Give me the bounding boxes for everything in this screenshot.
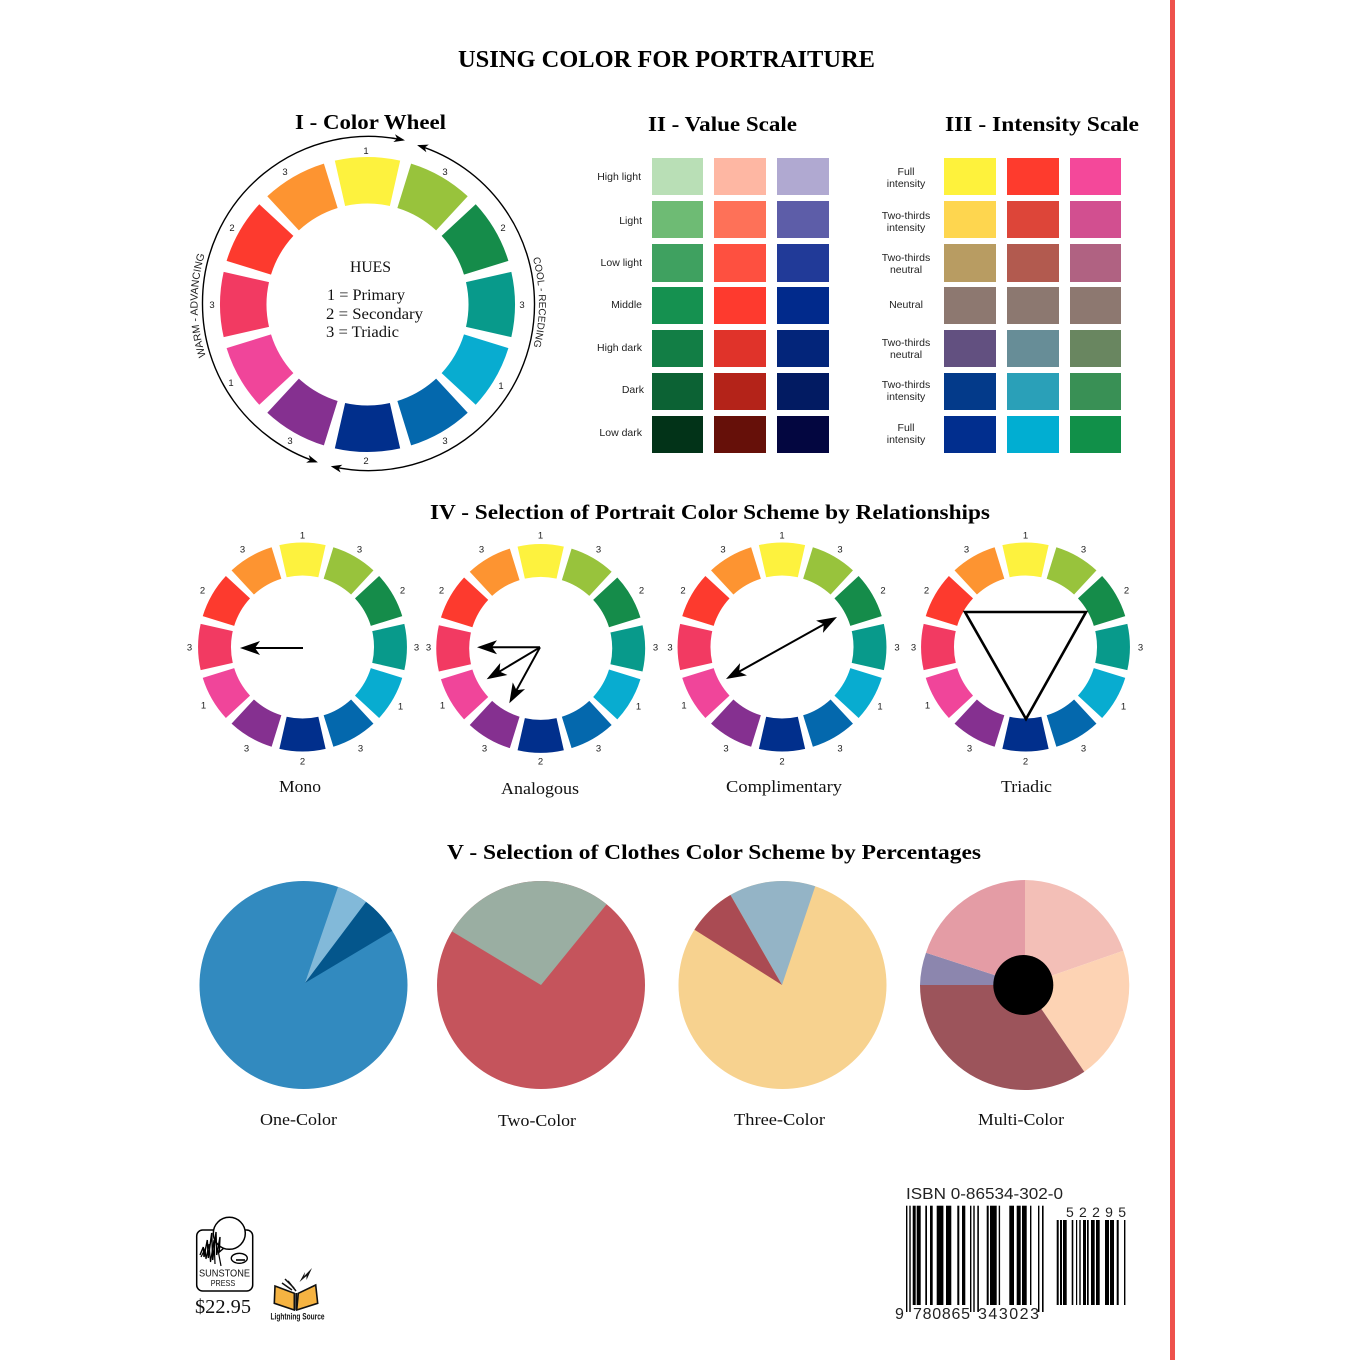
value row labels: Middle bbox=[611, 299, 642, 311]
intensity row labels: intensity bbox=[887, 391, 926, 403]
panel: IV portrait color schemes bbox=[187, 500, 1143, 798]
pie: three-color bbox=[678, 860, 886, 1129]
caption: analogous: Analogous bbox=[501, 779, 579, 798]
hue number labels: 3 bbox=[287, 436, 293, 447]
wheel: complimentary: 2 bbox=[680, 586, 686, 596]
wheel: mono: 3 bbox=[244, 744, 249, 754]
wheel: triadic: 3 bbox=[1081, 744, 1086, 754]
wheel: triadic: 2 bbox=[1124, 586, 1129, 596]
barcode digits: 343023 bbox=[978, 1306, 1039, 1323]
barcode bbox=[906, 1206, 1044, 1312]
panel: III intensity scale bbox=[882, 112, 1139, 453]
pie: two-color bbox=[435, 870, 645, 1130]
wheel: mono: 3 bbox=[187, 642, 192, 654]
barcode digits bbox=[895, 1306, 1039, 1323]
hues legend: 3 = Triadic bbox=[326, 324, 399, 341]
wheel: analogous: 3 bbox=[479, 544, 484, 556]
barcode digits: 780865 bbox=[913, 1306, 970, 1323]
wheel: mono: 3 bbox=[240, 544, 245, 556]
caption: complimentary: Complimentary bbox=[726, 777, 843, 796]
logo: sunstone press bbox=[197, 1217, 253, 1291]
logo: lightning source bbox=[270, 1268, 324, 1322]
wheel: analogous: 3 bbox=[596, 744, 601, 754]
intensity row labels: intensity bbox=[887, 434, 926, 446]
wheel: mono bbox=[187, 530, 419, 796]
hues legend: 1 = Primary bbox=[327, 287, 405, 304]
intensity row labels: Two-thirds bbox=[882, 337, 930, 349]
intensity row labels: Full bbox=[898, 166, 914, 178]
wheel: complimentary: 1 bbox=[877, 702, 883, 712]
wheel: analogous: 1 bbox=[440, 700, 445, 712]
caption: one-color: One-Color bbox=[260, 1110, 337, 1129]
wheel: mono: 2 bbox=[400, 586, 405, 596]
wheel: analogous: 2 bbox=[538, 756, 543, 768]
wheel: analogous: 2 bbox=[639, 586, 644, 596]
hue number labels: 1 bbox=[363, 146, 369, 157]
intensity row labels: Full bbox=[898, 422, 914, 434]
logo: sunstone press: PRESS bbox=[211, 1278, 235, 1288]
pie: one-color bbox=[200, 868, 409, 1129]
wheel: complimentary: 3 bbox=[723, 744, 729, 754]
wheel: triadic bbox=[911, 530, 1143, 796]
hues legend: HUES bbox=[350, 259, 391, 276]
red spine line bbox=[1170, 0, 1175, 1360]
value row labels: Dark bbox=[622, 384, 645, 396]
wheel: triadic: 1 bbox=[925, 700, 930, 712]
heading: intensity scale: III - Intensity Scale bbox=[945, 112, 1139, 136]
wheel: triadic: 2 bbox=[924, 586, 929, 596]
wheel: mono: 1 bbox=[398, 702, 403, 712]
logo: lightning source: Lightning Source bbox=[270, 1312, 324, 1322]
wheel: triadic: 2 bbox=[1023, 756, 1028, 768]
intensity row labels: Two-thirds bbox=[882, 210, 930, 222]
caption: multi-color: Multi-Color bbox=[978, 1110, 1064, 1129]
wheel: analogous: 1 bbox=[636, 702, 641, 712]
hue number labels: 2 bbox=[500, 223, 506, 234]
caption: three-color: Three-Color bbox=[734, 1110, 825, 1129]
wheel: analogous: 2 bbox=[439, 586, 444, 596]
value swatches bbox=[652, 158, 829, 453]
wheel: mono: 2 bbox=[200, 586, 205, 596]
heading: value scale: II - Value Scale bbox=[648, 112, 797, 136]
wheel: mono: 3 bbox=[357, 544, 362, 556]
wheel: complimentary: 3 bbox=[894, 642, 900, 654]
barcode digits: 9 bbox=[895, 1306, 904, 1323]
wheel: triadic: 3 bbox=[964, 544, 969, 556]
wheel: triadic: 1 bbox=[1121, 702, 1126, 712]
hue number labels: 1 bbox=[498, 381, 504, 392]
caption: two-color: Two-Color bbox=[498, 1111, 576, 1130]
value row labels bbox=[597, 171, 645, 439]
title: USING COLOR FOR PORTRAITURE bbox=[458, 47, 875, 73]
hue number labels bbox=[209, 146, 525, 467]
wheel: triadic: 1 bbox=[1023, 530, 1028, 542]
heading: percentages: V - Selection of Clothes Color Scheme by Percentages bbox=[447, 840, 981, 864]
hue number labels: 3 bbox=[282, 167, 288, 178]
intensity row labels: Two-thirds bbox=[882, 252, 930, 264]
intensity row labels bbox=[882, 166, 930, 446]
wheel: analogous: 1 bbox=[538, 530, 543, 542]
intensity row labels: Two-thirds bbox=[882, 379, 930, 391]
hues legend bbox=[326, 259, 423, 341]
wheel: analogous bbox=[426, 530, 658, 798]
warm label: WARM - ADVANCING bbox=[190, 254, 206, 358]
wheel: analogous: 3 bbox=[596, 544, 601, 556]
wheel: mono: 1 bbox=[300, 530, 305, 542]
wheel: triadic: 3 bbox=[967, 744, 972, 754]
intensity row labels: intensity bbox=[887, 222, 926, 234]
wheel: analogous: 3 bbox=[426, 642, 431, 654]
hue number labels: 3 bbox=[519, 300, 525, 311]
heading: color wheel: I - Color Wheel bbox=[295, 110, 446, 134]
intensity row labels: intensity bbox=[887, 178, 926, 190]
caption: mono: Mono bbox=[279, 777, 321, 796]
wheel: mono: 1 bbox=[201, 700, 206, 712]
wheel: complimentary: 1 bbox=[681, 700, 687, 712]
wheel: complimentary: 3 bbox=[837, 544, 843, 556]
logo: sunstone press: SUNSTONE bbox=[199, 1268, 250, 1280]
hue number labels: 2 bbox=[363, 456, 369, 467]
value row labels: High dark bbox=[597, 342, 643, 354]
hues legend: 2 = Secondary bbox=[326, 306, 423, 323]
wheel: mono: 3 bbox=[414, 642, 419, 654]
isbn text: ISBN 0-86534-302-0 bbox=[906, 1186, 1063, 1203]
hue number labels: 1 bbox=[228, 378, 234, 389]
value row labels: High light bbox=[597, 171, 641, 183]
panel: I color wheel bbox=[190, 110, 546, 472]
intensity row labels: Neutral bbox=[889, 299, 923, 311]
intensity swatches bbox=[944, 158, 1121, 453]
hue number labels: 2 bbox=[229, 223, 235, 234]
hue number labels: 3 bbox=[442, 167, 448, 178]
wheel: complimentary: 2 bbox=[880, 586, 886, 596]
warm arrow arc bbox=[202, 136, 403, 462]
value row labels: Light bbox=[619, 215, 642, 227]
color wheel segments bbox=[220, 157, 515, 452]
wheel: mono: 3 bbox=[358, 744, 363, 754]
wheel: complimentary: 1 bbox=[779, 530, 785, 542]
wheel: mono: 2 bbox=[300, 756, 305, 768]
intensity row labels: neutral bbox=[890, 349, 922, 361]
wheel: triadic: 3 bbox=[911, 642, 916, 654]
pie: multi-color bbox=[920, 880, 1129, 1129]
wheel: analogous: 3 bbox=[653, 642, 658, 654]
wheel: complimentary bbox=[667, 530, 900, 796]
cool label: COOL - RECEDING bbox=[534, 258, 546, 348]
arrows: analogous bbox=[481, 647, 540, 700]
wheel: triadic: 3 bbox=[1081, 544, 1086, 556]
hue number labels: 3 bbox=[209, 300, 215, 311]
value row labels: Low light bbox=[601, 257, 642, 269]
panel: II value scale bbox=[597, 112, 829, 453]
wheel: complimentary: 2 bbox=[779, 756, 785, 768]
panel: V clothes color schemes bbox=[200, 840, 1129, 1130]
cool arrow arc bbox=[333, 146, 535, 471]
arrow: complimentary bbox=[730, 619, 834, 677]
value row labels: Low dark bbox=[599, 427, 643, 439]
price: $22.95 bbox=[195, 1296, 251, 1318]
wheel: triadic: 3 bbox=[1138, 642, 1143, 654]
heading: relationships: IV - Selection of Portrait Color Scheme by Relationships bbox=[430, 500, 990, 524]
wheel: analogous: 3 bbox=[482, 744, 487, 754]
hue number labels: 3 bbox=[442, 436, 448, 447]
add-on barcode digits: 52295 bbox=[1066, 1204, 1126, 1220]
arrow: mono bbox=[244, 647, 303, 649]
intensity row labels: neutral bbox=[890, 264, 922, 276]
add-on barcode bbox=[1057, 1220, 1125, 1305]
triangle: triadic bbox=[965, 612, 1086, 719]
caption: triadic: Triadic bbox=[1001, 777, 1052, 796]
wheel: complimentary: 3 bbox=[667, 642, 673, 654]
wheel: complimentary: 3 bbox=[720, 544, 726, 556]
wheel: complimentary: 3 bbox=[837, 744, 843, 754]
